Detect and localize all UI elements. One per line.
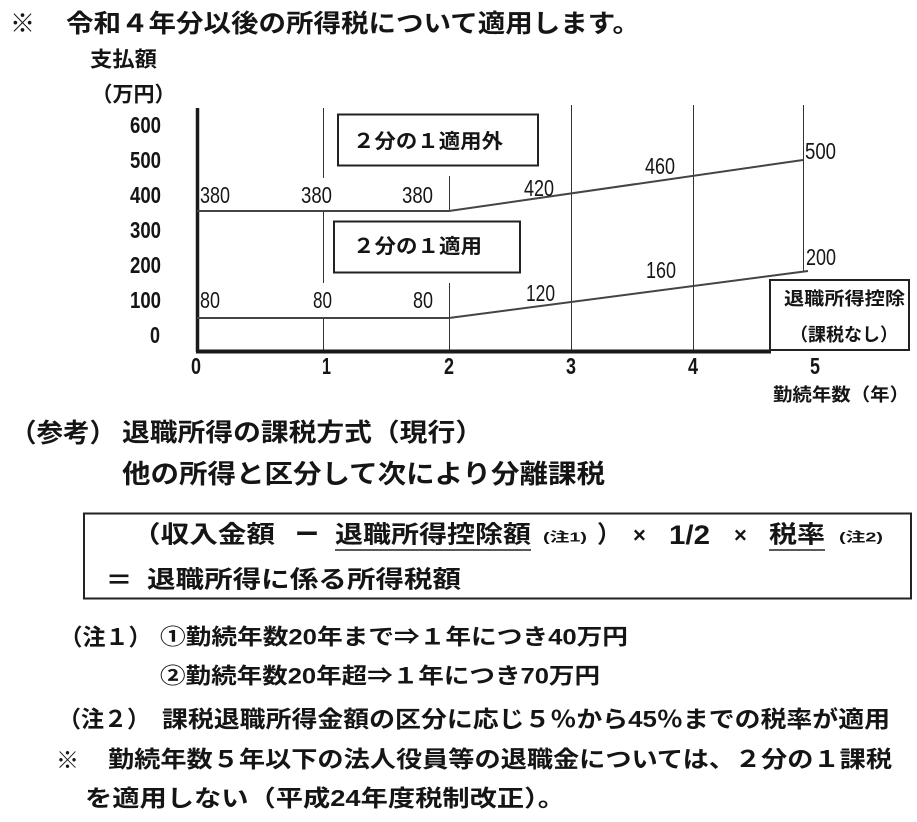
note: corporate officers [56,746,892,811]
x-axis labels: 1 [322,353,331,379]
note 2: （注２） [58,706,150,732]
callout: one-half rule [334,222,520,272]
note 2: 課税退職所得金額の区分に応じ５％から45％までの税率が適用 [162,706,890,732]
data labels: lower line: 200 [806,244,836,270]
formula box: (注1) [543,530,587,544]
y-axis labels: 500 [130,147,161,173]
formula box: 退職所得控除額 [335,522,531,548]
x-axis labels: 3 [566,353,576,379]
note 1: ①勤続年数20年まで⇒１年につき40万円 [160,624,628,650]
heading: reference: 他の所得と区分して次により分離課税 [122,459,605,489]
y-axis labels: 200 [130,252,161,278]
formula box: × [734,522,747,548]
callout: retirement income deduction [770,280,909,350]
data labels: lower line: 120 [526,280,555,306]
formula box [84,514,911,598]
data labels: lower line: 80 [413,287,433,313]
title: ※ [10,10,35,38]
data labels: upper line [200,138,836,208]
callout: outside one-half rule: ２分の１適用外 [353,130,503,153]
formula box: × [633,522,646,548]
line: one-half rule [197,271,808,318]
formula box: 退職所得に係る所得税額 [147,566,461,594]
y-axis title [90,48,176,106]
data labels: upper line: 460 [645,153,675,179]
note: corporate officers: ※ [56,747,79,773]
data labels: upper line: 420 [524,175,554,201]
line: outside one-half rule [197,160,803,211]
y-axis labels: 400 [130,182,161,208]
data labels: upper line: 500 [805,138,836,164]
callout: retirement income deduction: 退職所得控除 [784,289,905,309]
note 1: （注１） [60,624,152,650]
x-axis labels: 0 [191,353,201,379]
callout: outside one-half rule [338,114,538,166]
y-axis labels: 600 [130,112,161,138]
data labels: lower line: 80 [200,287,220,313]
y-axis labels: 300 [130,217,161,243]
data labels: upper line: 380 [402,182,433,208]
x-axis labels: 2 [444,353,454,379]
data labels: upper line: 380 [200,182,230,208]
formula box: (注2) [839,530,883,544]
heading: reference [10,418,605,489]
x-axis labels [191,353,820,379]
note: corporate officers: 勤続年数５年以下の法人役員等の退職金については、２分の１課税 [108,746,892,772]
callout: retirement income deduction: （課税なし） [790,325,898,345]
y-axis labels: 100 [130,287,161,313]
formula box: ー [295,522,319,548]
x-axis labels: 5 [810,353,820,379]
formula box: 1/2 [669,520,710,550]
chart: payment amount by years of service [90,48,909,405]
formula box: 税率 [769,522,825,548]
x-axis labels: 4 [688,353,698,379]
note 1: ②勤続年数20年超⇒１年につき70万円 [160,664,600,688]
y-axis title: （万円） [92,84,176,106]
y-axis labels [130,112,161,348]
formula box: = [108,566,130,594]
heading: reference: （参考） [10,418,116,448]
data labels: upper line: 380 [301,182,332,208]
y-axis labels: 0 [150,322,160,348]
data labels: lower line: 80 [313,287,332,313]
grid lines [324,105,804,350]
data labels: lower line: 160 [646,257,676,283]
x-axis title: 勤続年数（年） [773,384,909,405]
formula box: （収入金額 [132,522,275,548]
note 1 [60,624,628,688]
title: 令和４年分以後の所得税について適用します。 [66,10,640,38]
data labels: lower line [200,244,836,313]
axes [196,108,771,352]
heading: reference: 退職所得の課税方式（現行） [122,419,483,447]
note: corporate officers: を適用しない（平成24年度税制改正）。 [85,785,565,811]
callout: one-half rule: ２分の１適用 [353,235,482,258]
y-axis title: 支払額 [90,48,157,72]
formula box: ） [597,522,621,548]
